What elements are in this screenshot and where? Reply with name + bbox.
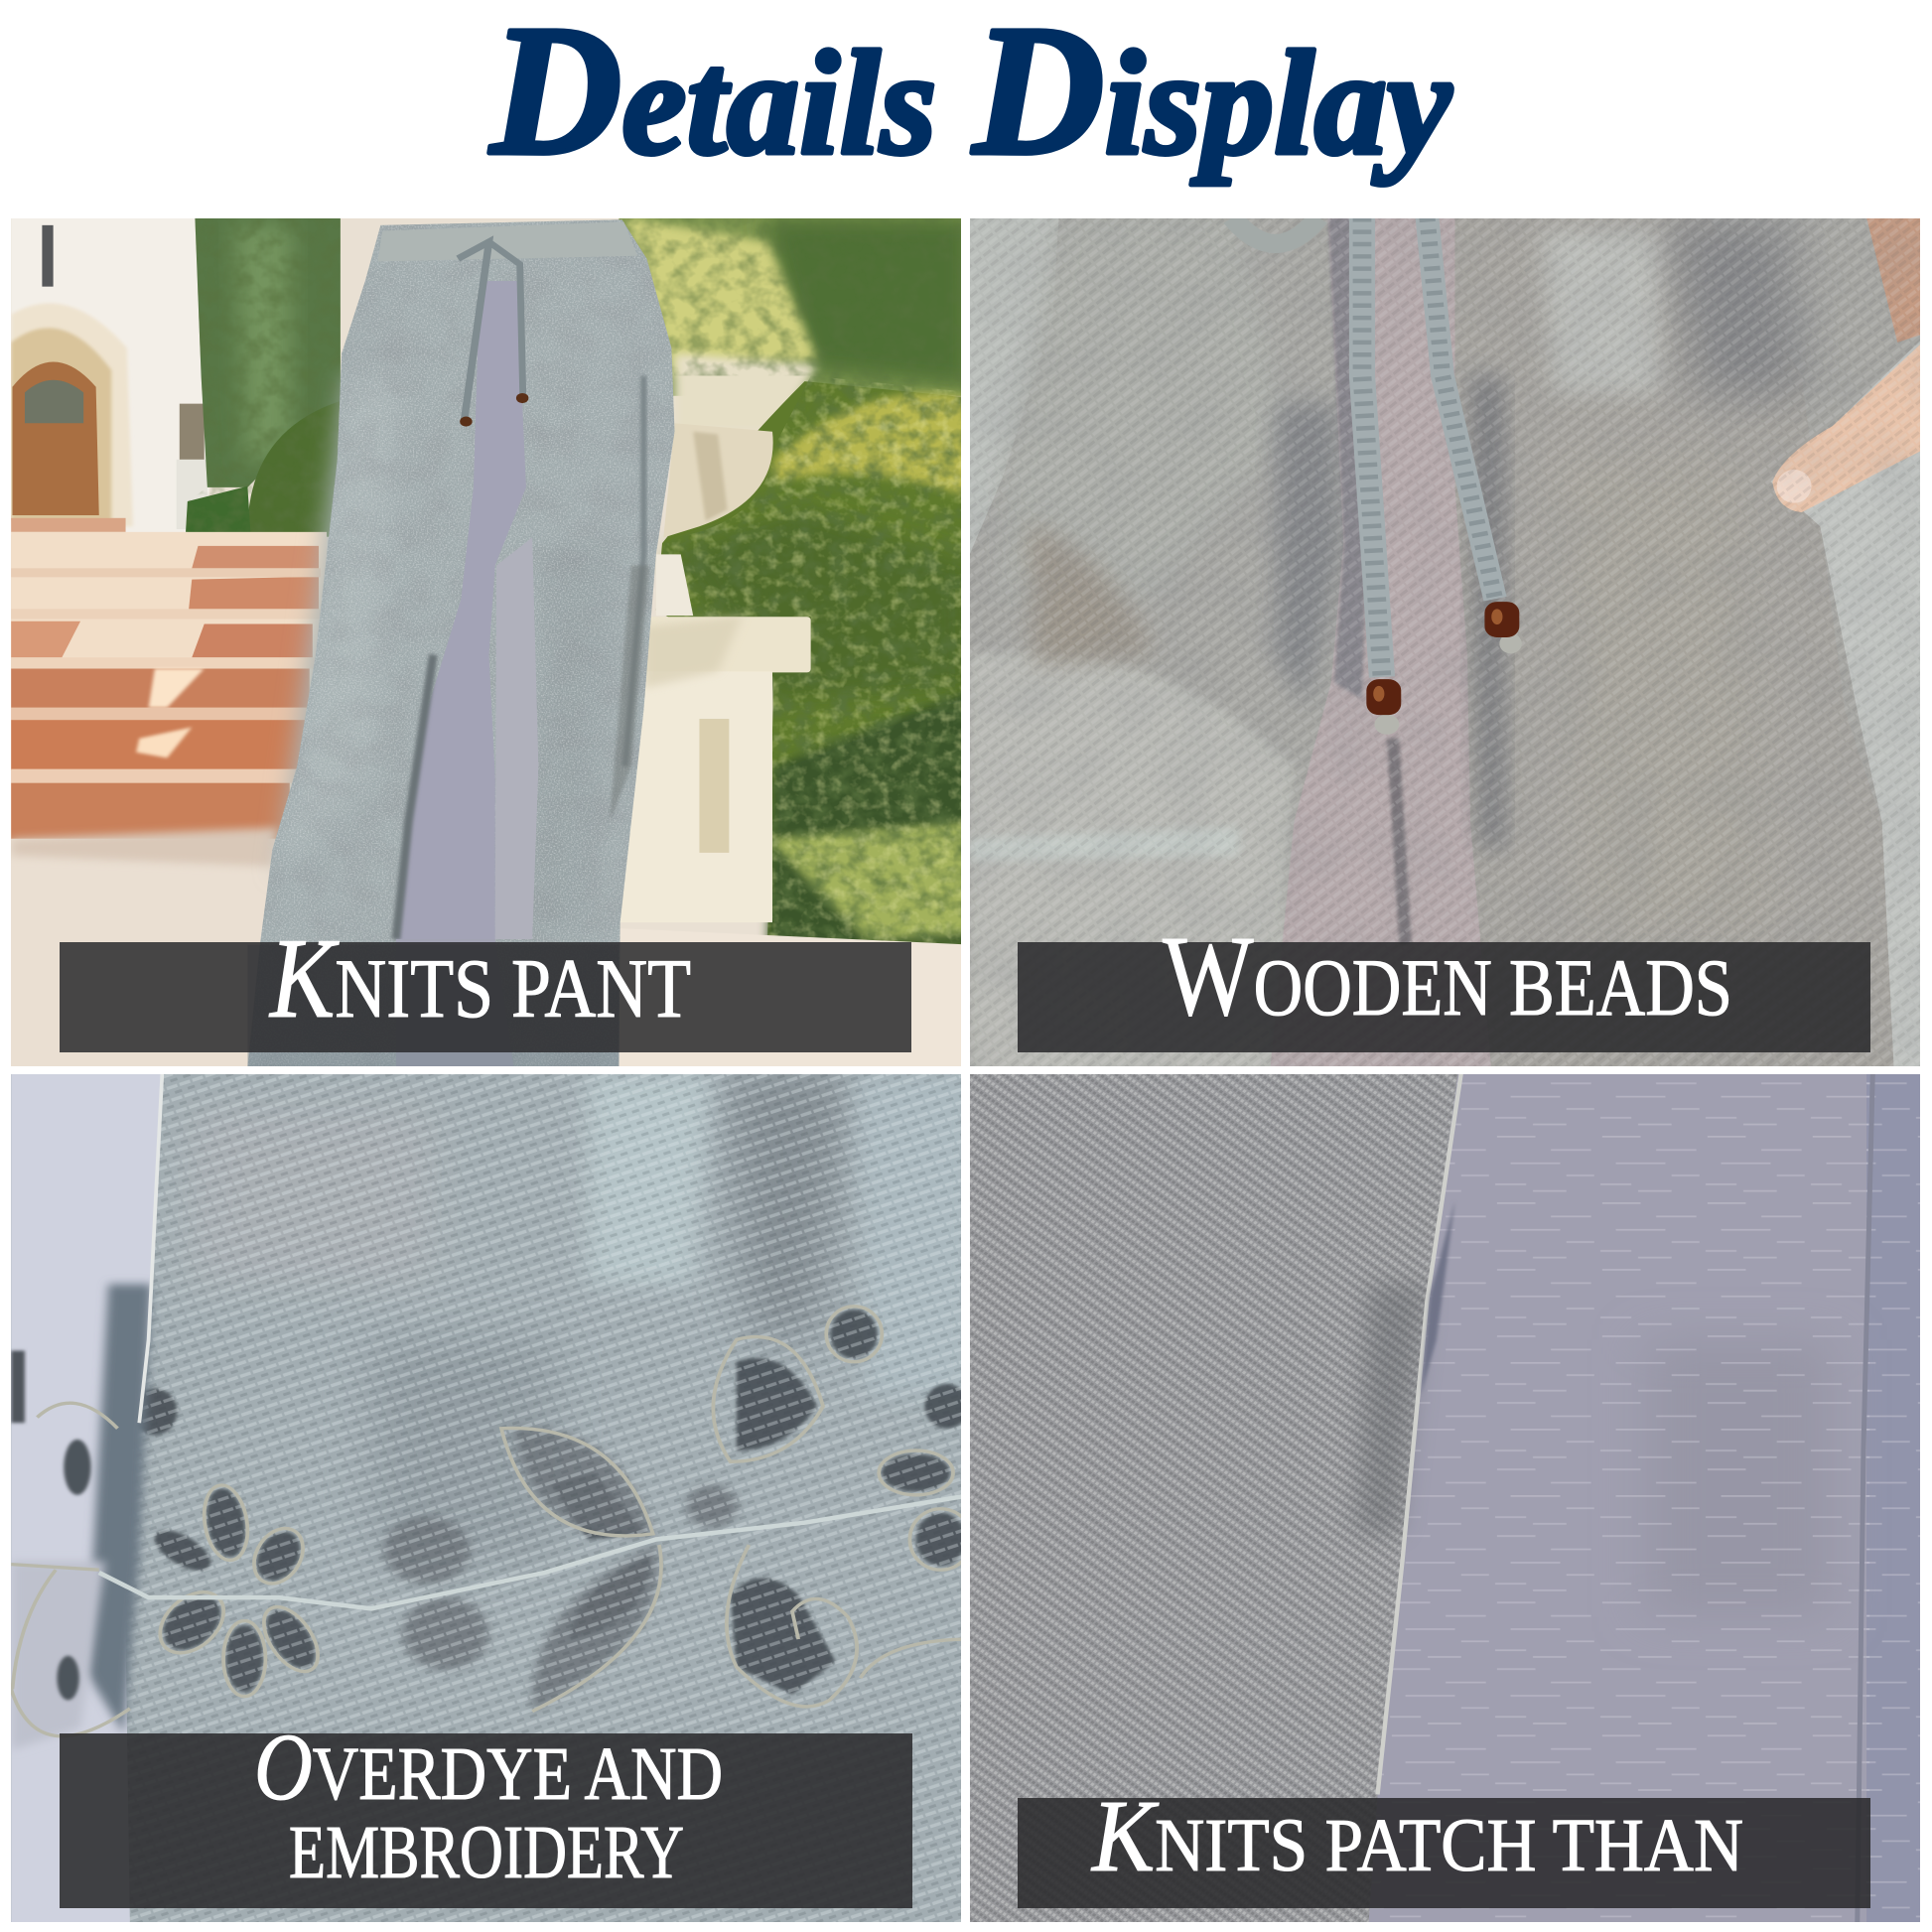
label bar: overdye and embroidery: OVERDYE AND (254, 1714, 723, 1820)
label bar: wooden beads: WOODEN BEADS (1163, 913, 1732, 1040)
panel: knits patch photo (970, 1073, 1932, 1928)
photo scene: drawstring close-up (970, 217, 1932, 1078)
urn (663, 423, 773, 537)
fabric texture (970, 218, 1920, 1066)
panel: wooden beads photo (970, 217, 1932, 1078)
photo scene: twill and gauze panels (970, 1073, 1932, 1928)
label bar: knits patch than: KNITS PATCH THAN (1090, 1779, 1743, 1893)
embroidered vine outlines (11, 1307, 972, 1736)
ground (12, 838, 67, 839)
steps (11, 532, 328, 657)
embroidery shading (132, 1310, 969, 1695)
label bar: knits pant (60, 915, 911, 1052)
photo scene: embroidered fabric (11, 1073, 972, 1928)
photo scene: garden and stairs (11, 217, 972, 1073)
label bar: overdye and embroidery (60, 1714, 912, 1908)
drawstring cords and wooden beads (1232, 217, 1522, 735)
panel: overdye and embroidery photo (11, 1073, 972, 1928)
right garden (619, 217, 972, 396)
pants (247, 219, 675, 1067)
bench and pedestal (667, 617, 811, 673)
panel: knits pant photo (11, 217, 972, 1073)
label bar: overdye and embroidery: EMBROIDERY (289, 1811, 684, 1894)
label bar: knits pant: KNITS PANT (268, 915, 691, 1042)
